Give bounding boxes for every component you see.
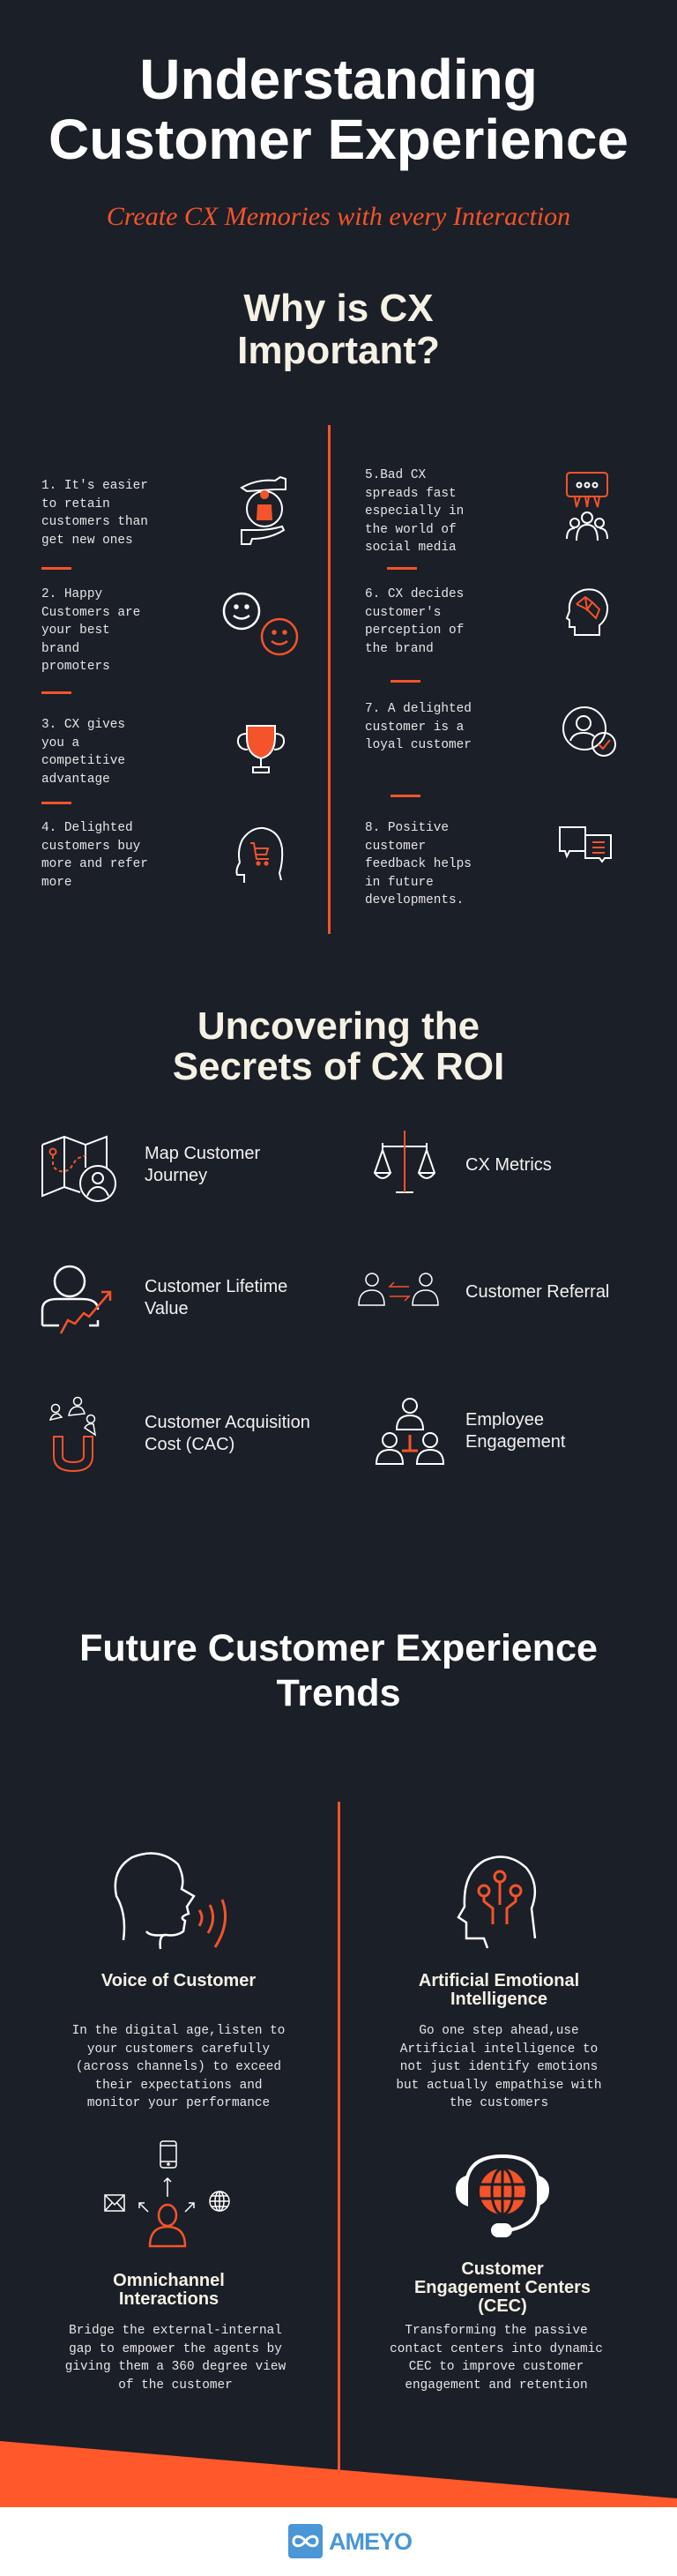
footer white — [0, 2507, 677, 2576]
text: customer referral: Customer Referral — [465, 1282, 609, 1302]
text: of the customer — [118, 2378, 233, 2392]
icon: omnichannel person — [104, 2140, 233, 2248]
text 8: developments. — [365, 893, 464, 907]
icon: employee engagement — [376, 1398, 444, 1465]
text 6: 6. CX decides — [365, 587, 464, 601]
text 4 — [41, 821, 148, 889]
title: Understanding — [139, 48, 538, 111]
title: voice of customer: Voice of Customer — [101, 1971, 256, 1990]
icon: referral — [358, 1273, 439, 1306]
text 4: customers buy — [41, 840, 140, 854]
heading: why is cx important: Important? — [237, 329, 440, 372]
text: employee engagement: Engagement — [465, 1432, 565, 1452]
text: map customer journey — [145, 1144, 260, 1185]
icon: smileys — [222, 593, 298, 656]
heading: uncovering roi: Uncovering the — [197, 1004, 480, 1048]
text — [72, 2024, 285, 2110]
text 2: promoters — [41, 660, 110, 674]
text 4: more — [41, 875, 72, 889]
panel: omnichannel — [0, 2134, 338, 2399]
text 6 — [365, 587, 464, 656]
text: gap to empower the agents by — [69, 2342, 282, 2356]
text: contact centers into dynamic — [390, 2342, 603, 2356]
icon: trophy — [236, 725, 286, 773]
title: omnichannel interactions: Omnichannel — [113, 2271, 225, 2290]
text: AMEYO: AMEYO — [329, 2528, 412, 2555]
text 3: 3. CX gives — [41, 718, 125, 732]
text: employee engagement: Employee — [465, 1410, 544, 1430]
text — [340, 2322, 652, 2394]
text 7: customer is a — [365, 720, 464, 734]
icon: magnet with people — [49, 1397, 96, 1472]
icon: head with network — [566, 588, 608, 636]
text 6: customer's — [365, 605, 441, 619]
title: omnichannel interactions: Interactions — [119, 2289, 219, 2309]
icon: chat bubble with group — [566, 472, 608, 541]
orange footer band — [0, 2434, 677, 2513]
text 1: 1. It's easier — [41, 479, 148, 493]
title: customer engagement centers — [340, 2260, 665, 2316]
logo: ameyo — [288, 2524, 422, 2559]
text: giving them a 360 degree view — [65, 2360, 286, 2374]
text 2: 2. Happy — [41, 587, 102, 601]
icon: speaking head — [115, 1852, 227, 1949]
title: artificial emotional intelligence: Artificial Emotional — [419, 1971, 579, 1990]
divider vertical trends — [338, 1802, 340, 2472]
panel: voice of customer — [72, 1852, 285, 2110]
text: your customers carefully — [87, 2042, 270, 2057]
text 8: feedback helps — [365, 857, 472, 871]
text: Go one step ahead,use — [419, 2024, 579, 2038]
text 6: the brand — [365, 642, 434, 656]
icon: person with check — [562, 706, 616, 757]
text: customer acquisition cost: Cost (CAC) — [145, 1435, 234, 1454]
text 5: 5.Bad CX — [365, 468, 426, 482]
text: not just identify emotions — [400, 2060, 598, 2074]
text 8: in future — [365, 875, 434, 889]
text: CEC to improve customer — [409, 2360, 584, 2374]
text 5: spreads fast — [365, 487, 457, 501]
text: In the digital age,listen to — [72, 2024, 285, 2038]
text: cx metrics: CX Metrics — [465, 1155, 552, 1175]
text: customer lifetime value: Value — [145, 1299, 189, 1318]
text 1: to retain — [41, 497, 110, 511]
heading: why is cx important: Why is CX — [243, 287, 434, 330]
icon: scales — [374, 1131, 435, 1193]
text — [0, 2322, 351, 2394]
text: map customer journey: Map Customer — [145, 1144, 260, 1163]
text 3: competitive — [41, 754, 125, 768]
divider line vertical — [328, 425, 331, 934]
panel: reasons right — [365, 468, 472, 907]
icon: feedback bubbles — [559, 826, 612, 862]
title — [48, 48, 629, 171]
text: the customers — [450, 2096, 548, 2110]
text 1 — [41, 479, 148, 547]
title: customer engagement centers: Customer — [461, 2259, 544, 2279]
text 2: your best — [41, 623, 110, 638]
heading: uncovering roi: Secrets of CX ROI — [173, 1045, 504, 1088]
icon: infinity — [288, 2524, 323, 2558]
text: engagement and retention — [405, 2378, 588, 2392]
panel: reasons left — [41, 479, 148, 889]
text: Artificial intelligence to — [400, 2042, 598, 2057]
heading: why is cx important — [237, 287, 440, 372]
text 4: more and refer — [41, 857, 148, 871]
text: (across channels) to exceed — [76, 2060, 281, 2074]
text 7: 7. A delighted — [365, 702, 472, 716]
heading: future trends: Trends — [277, 1672, 400, 1714]
heading: uncovering roi — [173, 1004, 504, 1088]
icon: map journey — [41, 1136, 116, 1202]
text 5: social media — [365, 541, 457, 555]
text: Transforming the passive — [405, 2324, 588, 2338]
text: customer lifetime value: Customer Lifetime — [145, 1277, 287, 1296]
icon: headset globe — [456, 2154, 549, 2239]
text 8 — [365, 821, 472, 907]
text 7: loyal customer — [365, 738, 472, 752]
icon: head with circuit — [457, 1855, 536, 1949]
text 3 — [41, 718, 125, 787]
text 5 — [365, 468, 464, 555]
text: Bridge the external-internal — [69, 2324, 282, 2338]
text 2 — [41, 587, 140, 674]
text 4: 4. Delighted — [41, 821, 133, 835]
text: but actually empathise with — [396, 2078, 602, 2092]
text: employee engagement — [465, 1410, 566, 1452]
text: monitor your performance — [87, 2096, 270, 2110]
panel: customer engagement centers — [340, 2134, 677, 2399]
text 8: customer — [365, 840, 426, 854]
text 8: 8. Positive — [365, 821, 449, 835]
icon: lifetime value — [41, 1265, 111, 1334]
heading: future trends: Future Customer Experience — [79, 1627, 598, 1669]
text 3: advantage — [41, 773, 110, 787]
text — [396, 2024, 602, 2110]
text 6: perception of — [365, 623, 464, 638]
icon: hands with person — [240, 476, 286, 545]
title: omnichannel interactions — [0, 2272, 338, 2309]
panel: roi items — [41, 1131, 609, 1472]
panel: artificial emotional intelligence — [396, 1855, 602, 2110]
text 5: especially in — [365, 504, 464, 519]
text 1: customers than — [41, 515, 148, 529]
text: customer acquisition cost: Customer Acquisition — [145, 1413, 310, 1432]
title: customer engagement centers: Engagement Centers — [414, 2278, 591, 2297]
text 1: get new ones — [41, 533, 133, 547]
title: artificial emotional intelligence — [419, 1971, 579, 2009]
text: customer acquisition cost — [145, 1413, 310, 1454]
text 3: you a — [41, 735, 79, 750]
title: customer engagement centers: (CEC) — [478, 2296, 527, 2316]
text 7 — [365, 702, 472, 752]
title: artificial emotional intelligence: Intelligence — [450, 1990, 547, 2009]
subtitle: Create CX Memories with every Interaction — [107, 202, 570, 231]
icon: head with cart — [235, 827, 284, 883]
title: Customer Experience — [48, 108, 629, 171]
text 5: the world of — [365, 522, 457, 536]
text: map customer journey: Journey — [145, 1166, 207, 1185]
text 2: brand — [41, 642, 79, 656]
heading: future trends — [79, 1627, 598, 1714]
text: their expectations and — [95, 2078, 263, 2092]
text: customer lifetime value — [145, 1277, 287, 1318]
text 2: Customers are — [41, 605, 140, 619]
